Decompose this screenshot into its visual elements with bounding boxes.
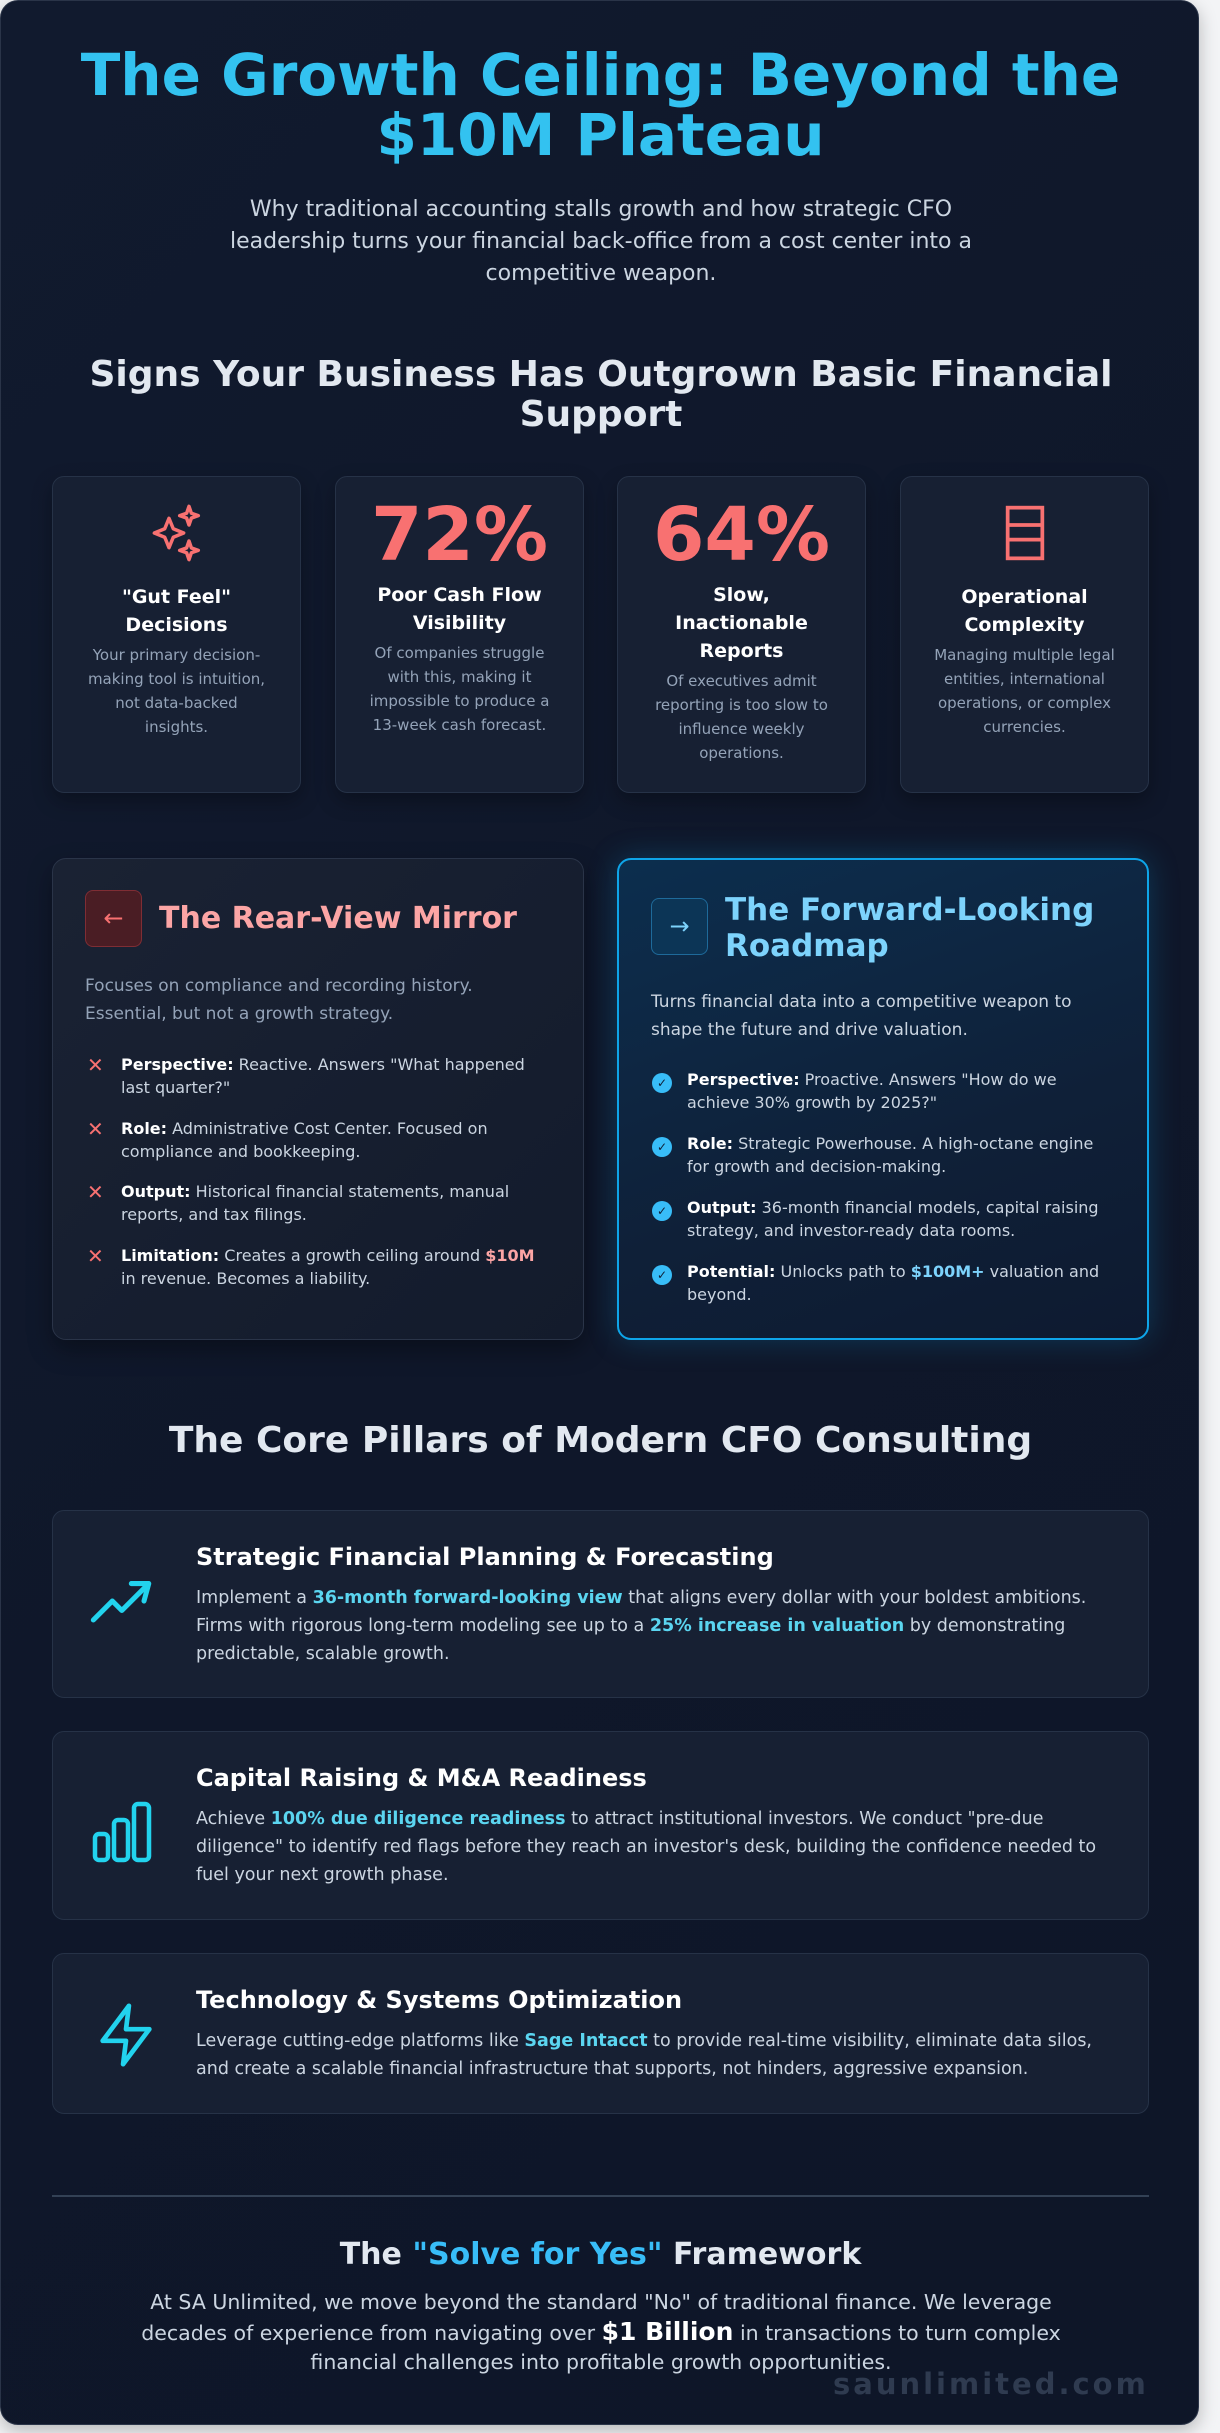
footer text: At SA Unlimited, we move beyond the standard "No" of traditional finance. We leverage — [150, 2290, 1052, 2314]
icon: forward arrow: → — [669, 912, 690, 940]
section heading: signs: Signs Your Business Has Outgrown Basic Financial Support — [90, 354, 1112, 435]
pillar: capital raising: Capital Raising & M&A Readiness — [196, 1764, 647, 1792]
card: gut feel: Your primary decision-making tool is intuition, not data-backed insights. — [88, 646, 265, 736]
pillar: planning: Strategic Financial Planning & Forecasting — [196, 1543, 774, 1571]
list: benefits: ✓ — [657, 1268, 667, 1282]
icon: sparkles — [152, 504, 200, 562]
card: 64%: Of executives admit reporting is too slow to influence weekly operations. — [655, 672, 828, 762]
list: limitations — [87, 1053, 535, 1288]
pillar: technology — [52, 1953, 1149, 2114]
card: 64%: Slow, — [713, 584, 770, 606]
card: 64% — [617, 476, 866, 793]
icon: back arrow — [85, 890, 142, 947]
list: limitations: Output: Historical financial statements, manual reports, and tax filings. — [121, 1182, 509, 1224]
footer text: financial challenges into profitable growth opportunities. — [310, 2350, 892, 2374]
list: benefits: Potential: Unlocks path to $100M+ valuation and beyond. — [687, 1262, 1099, 1304]
list: limitations: ✕ — [87, 1244, 104, 1268]
pillar: planning — [52, 1510, 1149, 1698]
title — [81, 41, 1120, 169]
pillar: capital raising: Achieve 100% due diligence readiness to attract institutional investors. We conduct "pre-due diligence" to identify red flags before they reach an investor's desk, building the confidence needed to fuel your next growth phase. — [196, 1809, 1096, 1885]
card: gut feel: Decisions — [125, 614, 228, 636]
card: 72%: Visibility — [413, 612, 506, 634]
icon: trending up — [90, 1581, 152, 1622]
pillar: technology: Leverage cutting-edge platforms like Sage Intacct to provide real-time visibility, eliminate data silos, and create a scalable financial infrastructure that supports, not hinders, aggressive expansion. — [196, 2031, 1092, 2079]
heading: Roadmap — [725, 928, 889, 964]
pillar: capital raising — [52, 1731, 1149, 1920]
card: 72% — [335, 476, 584, 793]
card: 64%: Reports — [700, 640, 783, 662]
footer text — [141, 2290, 1061, 2374]
subtitle: Why traditional accounting stalls growth and how strategic CFO leadership turns your financial back-office from a cost center into a competitive weapon. — [230, 197, 972, 286]
list: limitations: Limitation: Creates a growth ceiling around $10M in revenue. Becomes a liability. — [121, 1246, 535, 1288]
heading: The Rear-View Mirror — [159, 901, 517, 936]
list: benefits — [652, 1070, 1099, 1304]
icon: forward arrow — [651, 898, 708, 955]
intro text: Focuses on compliance and recording history. Essential, but not a growth strategy. — [85, 976, 473, 1024]
panel: rear-view mirror — [52, 858, 584, 1340]
footer text: decades of experience from navigating over $1 Billion in transactions to turn complex — [141, 2317, 1061, 2346]
pillar: planning: Implement a 36-month forward-looking view that aligns every dollar with your boldest ambitions. Firms with rigorous long-term modeling see up to a 25% increase in valuation by demonstrating predictable, scalable growth. — [196, 1588, 1086, 1664]
title: The Growth Ceiling: Beyond the — [81, 41, 1120, 109]
heading — [725, 892, 1094, 964]
card: complexity: Operational — [961, 586, 1088, 608]
list: limitations: ✕ — [87, 1117, 104, 1141]
list: benefits: Perspective: Proactive. Answers "How do we achieve 30% growth by 2025?" — [687, 1070, 1057, 1112]
card: 72%: Of companies struggle with this, making it impossible to produce a 13-week cash forecast. — [370, 644, 549, 734]
watermark: saunlimited.com — [833, 2367, 1149, 2401]
card: complexity: Complexity — [964, 614, 1085, 636]
card: complexity: Managing multiple legal entities, international operations, or complex currencies. — [934, 646, 1115, 736]
card: 64%: 64% — [653, 492, 830, 578]
heading: The Forward-Looking — [725, 892, 1094, 928]
list: benefits: Role: Strategic Powerhouse. A high-octane engine for growth and decision-making. — [687, 1134, 1093, 1176]
card: gut feel: "Gut Feel" — [122, 586, 231, 608]
list: limitations: ✕ — [87, 1053, 104, 1077]
card: 64%: Inactionable — [675, 612, 808, 634]
icon: stacked list — [1006, 506, 1044, 560]
list: benefits: ✓ — [657, 1140, 667, 1154]
icon: bar chart — [92, 1802, 152, 1862]
list: benefits: ✓ — [657, 1076, 667, 1090]
title: $10M Plateau — [376, 101, 824, 169]
list: benefits: ✓ — [657, 1204, 667, 1218]
card: gut feel — [52, 476, 301, 793]
panel: forward-looking roadmap — [617, 858, 1149, 1340]
icon: back arrow: ← — [103, 904, 124, 932]
pillar: technology: Technology & Systems Optimization — [196, 1986, 682, 2014]
card: complexity — [900, 476, 1149, 793]
list: limitations: Perspective: Reactive. Answers "What happened last quarter?" — [121, 1055, 525, 1097]
list: limitations: Role: Administrative Cost Center. Focused on compliance and bookkeeping. — [121, 1119, 488, 1161]
list: limitations: ✕ — [87, 1180, 104, 1204]
card: 72%: 72% — [371, 492, 548, 578]
card: 72%: Poor Cash Flow — [377, 584, 542, 606]
icon: lightning — [100, 2004, 152, 2066]
footer heading: The "Solve for Yes" Framework — [340, 2237, 861, 2272]
list: benefits: Output: 36-month financial models, capital raising strategy, and investor-ready data rooms. — [687, 1198, 1099, 1240]
section heading: pillars: The Core Pillars of Modern CFO Consulting — [169, 1420, 1032, 1461]
intro text: Turns financial data into a competitive weapon to shape the future and drive valuation. — [651, 992, 1072, 1040]
